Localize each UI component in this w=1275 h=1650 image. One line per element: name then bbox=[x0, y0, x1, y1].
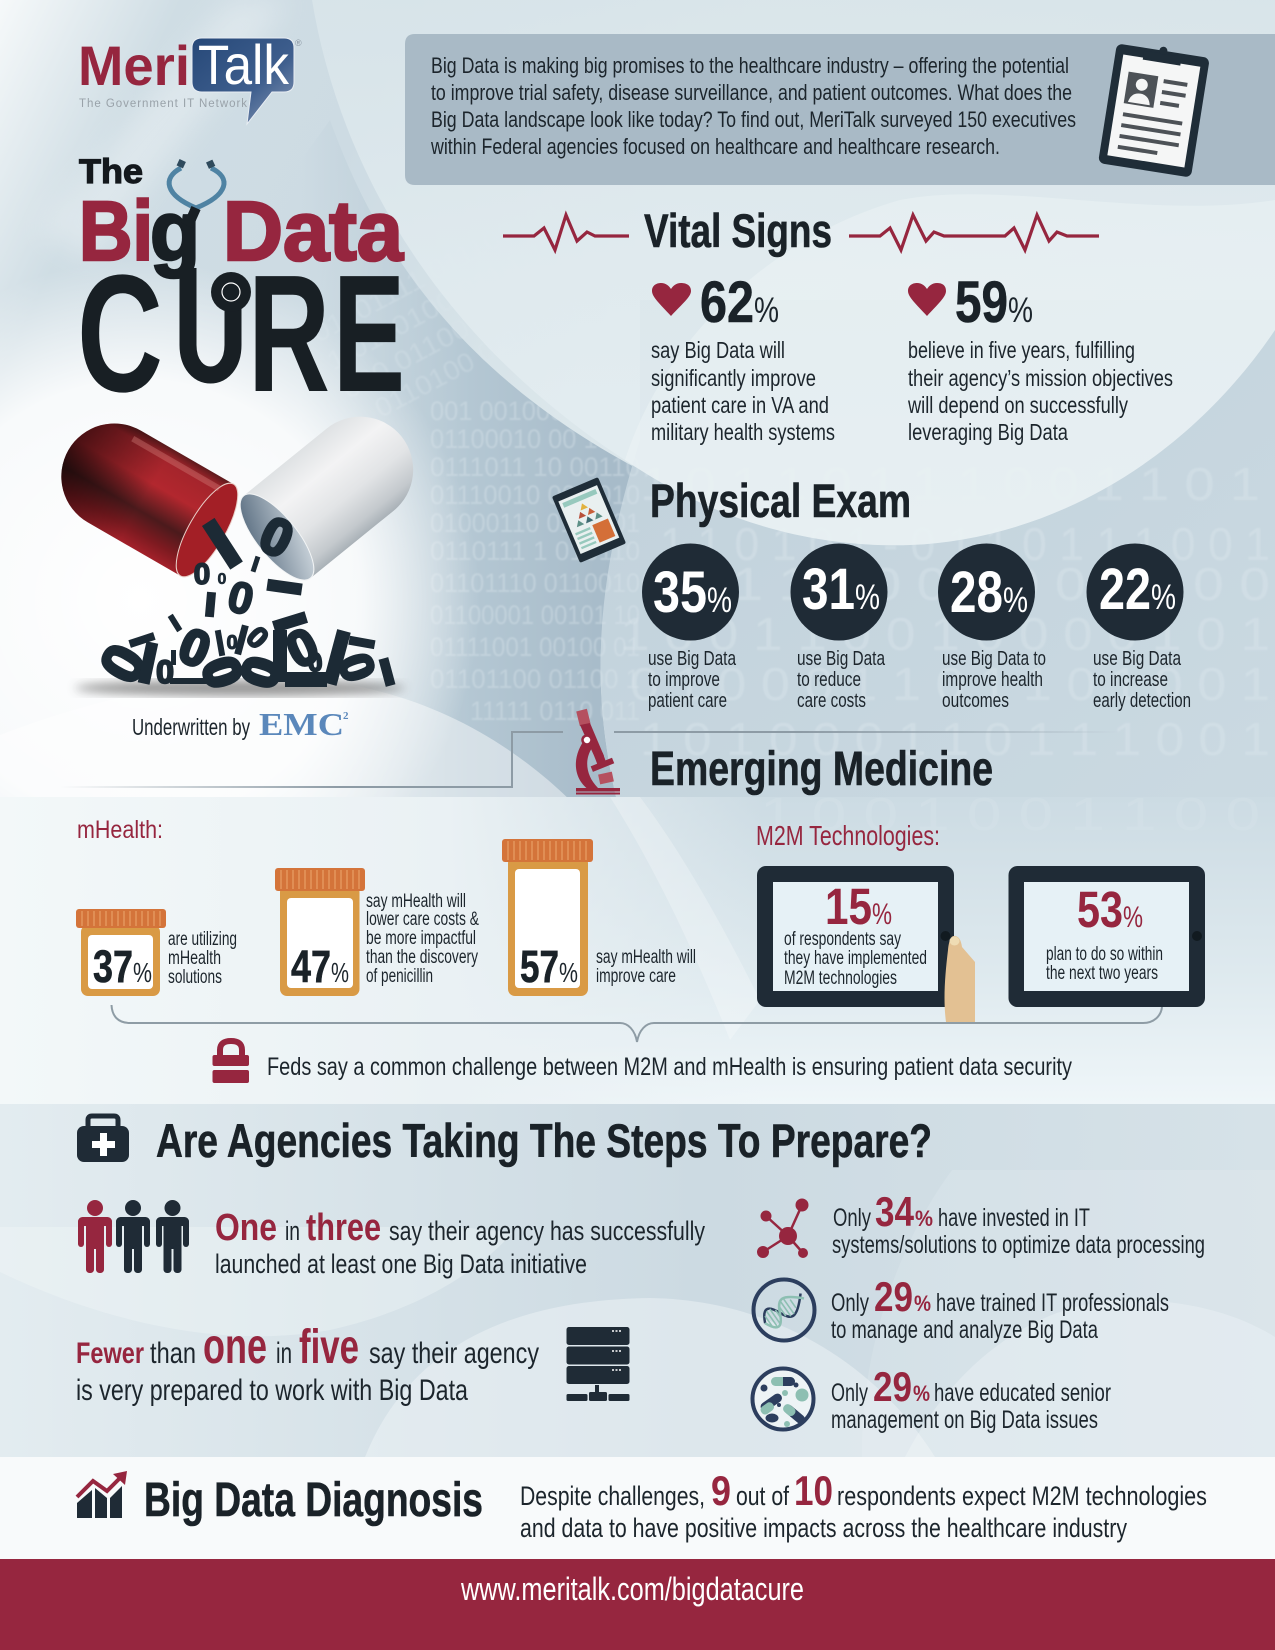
bottle 47%: of penicillin bbox=[366, 966, 433, 987]
background: upper collage: 0110100 01100100 00 bbox=[370, 266, 631, 423]
tablet 53%: % bbox=[1123, 901, 1143, 934]
stat: 59%: 59 bbox=[955, 270, 1008, 335]
background: upper collage: 01100010 00 1000 bbox=[430, 424, 640, 454]
section: Big Data Diagnosis: 10 bbox=[794, 1467, 833, 1514]
stat: 62%: patient care in VA and bbox=[651, 392, 829, 418]
icon: lock bbox=[212, 1041, 249, 1083]
footer band bbox=[0, 1559, 1275, 1650]
background: emerging medicine band: 1 0 0 1 0 0 1 1 0 0 bbox=[760, 788, 1260, 840]
heartbeat line left bbox=[503, 215, 629, 250]
bottle 57%: improve care bbox=[596, 966, 676, 987]
stat: one in three: three bbox=[306, 1207, 381, 1249]
background: agencies band bbox=[0, 1104, 1275, 1457]
icon: tablet chart bbox=[552, 477, 626, 563]
logo: MeriTalk: Meri bbox=[78, 34, 190, 97]
stat: 22%: early detection bbox=[1093, 690, 1191, 712]
sponsor: Underwritten by EMC bbox=[132, 706, 349, 742]
title: The Big Data Cure: Data bbox=[223, 184, 404, 278]
background: upper collage: 0110111 1 010110 bbox=[430, 536, 640, 566]
stat: 34% IT systems bbox=[758, 1188, 1205, 1259]
stat: 62%: say Big Data will bbox=[651, 337, 785, 363]
title: The Big Data Cure: The bbox=[79, 153, 143, 191]
bottle 37% bbox=[76, 909, 237, 996]
stat: 59%: believe in five years, fulfilling bbox=[908, 337, 1135, 363]
background: upper collage: 1 0110100 01101110 0 bbox=[322, 209, 601, 376]
stat: 62%: % bbox=[754, 291, 779, 330]
background: upper collage: 1 0 0 1 1 0 0 1 0 0 0 0 1 0 1 bbox=[620, 608, 1270, 660]
bottle 47% bbox=[275, 868, 479, 996]
bottle 57% bbox=[502, 839, 696, 996]
background: upper collage: 0 1 0 0 0 1 1 0 1 1 0 1 0 0 1 bbox=[630, 658, 1270, 710]
falling digits: 0 bbox=[194, 558, 210, 591]
background: upper collage: 01101111 01110010 01 bbox=[307, 181, 586, 348]
pile of digits: 0 bbox=[171, 617, 218, 679]
tablet 53%: the next two years bbox=[1046, 963, 1158, 984]
tablet 15% bbox=[757, 866, 954, 1007]
stat: 59%: will depend on successfully bbox=[907, 392, 1128, 418]
background: upper collage: 1 1 0 1 0 1 - 0 1 1 0 1 1 1 0 0 1 bbox=[660, 518, 1270, 570]
icon: DNA bbox=[754, 1280, 814, 1340]
stat: 34% IT systems: have invested in IT bbox=[938, 1204, 1090, 1232]
icon: rising chart bbox=[77, 1471, 127, 1518]
bottle 47%: lower care costs & bbox=[366, 909, 479, 930]
callout: patient data security: Feds say a common challenge between M2M and mHealth is ensuring patient data security bbox=[267, 1053, 1072, 1081]
stat: 31%: % bbox=[855, 578, 880, 617]
logo: MeriTalk: ® bbox=[295, 38, 302, 48]
logo: MeriTalk: The Government IT Network bbox=[79, 98, 247, 110]
stat: 29% trained IT professionals: to manage and analyze Big Data bbox=[831, 1316, 1098, 1344]
stat: 29% trained IT professionals: % bbox=[914, 1291, 931, 1316]
red capsule half bbox=[42, 404, 249, 585]
stat: 62%: military health systems bbox=[651, 419, 835, 445]
icon: network nodes bbox=[758, 1199, 808, 1258]
background: upper collage: 01101110 0110010 bbox=[430, 568, 640, 598]
title: The Big Data Cure: C bbox=[77, 241, 163, 427]
stat: 59%: % bbox=[1008, 291, 1033, 330]
stat: 22%: to increase bbox=[1093, 669, 1168, 691]
bottle 37%: solutions bbox=[168, 967, 222, 988]
background: upper collage: 01101100 01100 1 bbox=[430, 664, 640, 694]
stat: 28%: outcomes bbox=[942, 690, 1009, 712]
stat: fewer than one in five: in bbox=[276, 1337, 292, 1370]
icon: microscope bbox=[576, 709, 620, 794]
falling digits: 0 bbox=[218, 571, 227, 588]
pile of digits: 0 bbox=[306, 646, 324, 678]
title: The Big Data Cure: E bbox=[333, 241, 405, 427]
tablet 15%: 15 bbox=[825, 878, 872, 935]
title: The Big Data Cure bbox=[77, 153, 405, 427]
logo: MeriTalk: Talk bbox=[198, 33, 290, 96]
falling digits: 0 bbox=[251, 505, 302, 570]
tablet 53%: 53 bbox=[1077, 881, 1123, 938]
stat: 34% IT systems: Only bbox=[833, 1204, 871, 1232]
stat: 35%: to improve bbox=[648, 669, 720, 691]
panel: mHealth: mHealth: bbox=[77, 816, 163, 844]
background: upper collage: 000 01100100 01111 1 bbox=[337, 237, 616, 405]
sponsor: Underwritten by EMC: EMC bbox=[259, 706, 344, 742]
stat: one in three: One bbox=[215, 1207, 277, 1249]
bottle 47%: than the discovery bbox=[366, 947, 478, 968]
stat: 35%: 35 bbox=[653, 560, 707, 625]
bottle 57%: 57 bbox=[520, 941, 559, 992]
brace joining mHealth and M2M bbox=[112, 1005, 1162, 1042]
stat: 62%: significantly improve bbox=[651, 365, 816, 391]
pile of digits: 0 bbox=[191, 650, 253, 694]
sponsor: Underwritten by EMC: 2 bbox=[343, 710, 349, 722]
icon: first aid kit bbox=[77, 1116, 129, 1162]
stat: fewer than one in five: is very prepared to work with Big Data bbox=[76, 1374, 468, 1407]
stat: 28%: % bbox=[1003, 581, 1028, 620]
stat: 35%: use Big Data bbox=[648, 648, 737, 670]
stat: one in three bbox=[78, 1200, 705, 1279]
bottle 37%: mHealth bbox=[168, 948, 221, 969]
background: upper collage: 1 0 1 0 0 0 1 1 0 1 1 1 0 0 1 bbox=[640, 713, 1270, 765]
stat: 28%: use Big Data to bbox=[942, 648, 1046, 670]
section: Big Data Diagnosis: out of bbox=[736, 1481, 789, 1511]
panel: M2M Technologies: M2M Technologies: bbox=[756, 820, 940, 851]
bottle 57%: % bbox=[559, 957, 578, 988]
stat: 22% bbox=[1086, 544, 1191, 712]
stat: 29% educated management: Only bbox=[831, 1379, 868, 1407]
background: upper collage: 01111001 00100 01 bbox=[430, 632, 640, 662]
pile of digits: 0 bbox=[87, 634, 160, 694]
pile of digits bbox=[87, 611, 395, 694]
background: upper collage bbox=[0, 0, 1275, 880]
stat: 59%: their agency’s mission objectives bbox=[908, 365, 1173, 391]
panel: mHealth bbox=[76, 816, 696, 996]
icon: hand holding tablet bbox=[945, 936, 975, 1022]
background: upper collage: 001 00100000 011 bbox=[430, 396, 640, 426]
pile of digits: 0 bbox=[230, 650, 292, 694]
stat: fewer than one in five: say their agency bbox=[369, 1337, 539, 1370]
stat: 35%: patient care bbox=[648, 690, 727, 712]
bottle 37%: % bbox=[133, 957, 152, 988]
bottle 57%: say mHealth will bbox=[596, 947, 696, 968]
icon: three people bbox=[78, 1200, 189, 1273]
tablet 15%: % bbox=[872, 898, 892, 931]
bottle 37%: are utilizing bbox=[168, 929, 237, 950]
background: upper collage: 0111011 10 00110 bbox=[430, 452, 640, 482]
stat: fewer than one in five: five bbox=[299, 1321, 359, 1374]
stat: 31%: 31 bbox=[802, 557, 855, 622]
stat: 34% IT systems: 34 bbox=[875, 1188, 915, 1235]
stat: fewer than one in five: Fewer bbox=[76, 1337, 144, 1370]
icon: server bbox=[566, 1327, 630, 1401]
tablet 15%: M2M technologies bbox=[784, 968, 897, 989]
section: Big Data Diagnosis: Big Data Diagnosis bbox=[144, 1474, 483, 1527]
bottle 47%: % bbox=[331, 957, 349, 988]
title: The Big Data Cure: R bbox=[248, 241, 330, 427]
stat: 29% trained IT professionals: 29 bbox=[874, 1273, 913, 1320]
tablet 15%: of respondents say bbox=[784, 929, 901, 950]
footer url: www.meritalk.com/bigdatacure bbox=[460, 1571, 804, 1607]
background: upper collage: 01100001 00101 10 bbox=[430, 600, 640, 630]
white capsule half bbox=[228, 395, 435, 591]
background: diagnosis band bbox=[0, 1457, 1275, 1559]
section: Big Data Diagnosis: Despite challenges, bbox=[520, 1481, 705, 1511]
stat: 62%: 62 bbox=[700, 270, 754, 335]
stat: 62% bbox=[651, 270, 835, 445]
title: The Big Data Cure: g bbox=[150, 184, 200, 278]
section: Physical Exam bbox=[642, 474, 1191, 712]
stat: 29% trained IT professionals: have trained IT professionals bbox=[936, 1289, 1169, 1317]
icon: pills and bandages bbox=[752, 1368, 814, 1430]
stat: fewer than one in five: one bbox=[203, 1318, 267, 1374]
stat: 29% educated management: 29 bbox=[873, 1363, 912, 1410]
stat: 34% IT systems: % bbox=[915, 1206, 933, 1231]
title: The Big Data Cure: Bi bbox=[79, 184, 153, 278]
stat: 22%: % bbox=[1151, 578, 1176, 617]
callout: patient data security bbox=[212, 1041, 1072, 1083]
falling digits: 0 bbox=[223, 572, 258, 625]
stat: 59% bbox=[907, 270, 1173, 445]
section heading: Are Agencies Taking The Steps To Prepare?: Are Agencies Taking The Steps To Prepare? bbox=[156, 1114, 932, 1167]
stat: 28%: improve health bbox=[942, 669, 1043, 691]
illustration: capsule spilling binary digits bbox=[42, 395, 435, 696]
section: Physical Exam: Physical Exam bbox=[650, 474, 911, 527]
stat: 28%: 28 bbox=[950, 560, 1003, 625]
stat: 59%: leveraging Big Data bbox=[908, 419, 1068, 445]
connector lines bbox=[60, 731, 1120, 787]
background: upper collage: 01000110 0111001 bbox=[430, 508, 640, 538]
stat: 31%: care costs bbox=[797, 690, 866, 712]
bottle 47%: say mHealth will bbox=[366, 891, 466, 912]
stat: 35%: % bbox=[707, 581, 732, 620]
intro panel: Big Data landscape look like today? To find out, MeriTalk surveyed 150 executives bbox=[431, 107, 1076, 132]
section: Big Data Diagnosis bbox=[77, 1467, 1207, 1543]
bottle 47%: 47 bbox=[291, 941, 331, 992]
stat: 22%: 22 bbox=[1099, 557, 1151, 622]
icon: clipboard bbox=[1098, 39, 1210, 178]
intro panel: within Federal agencies focused on healthcare and healthcare research. bbox=[430, 134, 1000, 159]
stat: 31%: to reduce bbox=[797, 669, 861, 691]
background: upper collage: 11111 0110 011 bbox=[470, 696, 640, 726]
falling digits bbox=[168, 505, 303, 632]
bottle 47%: be more impactful bbox=[366, 928, 476, 949]
background: emerging medicine band bbox=[0, 788, 1275, 1104]
sponsor: Underwritten by EMC: Underwritten by bbox=[132, 714, 250, 740]
stat: 28% bbox=[938, 544, 1046, 712]
pile of digits: 0 bbox=[239, 620, 275, 656]
stat: 22%: use Big Data bbox=[1093, 648, 1182, 670]
stat: fewer than one in five bbox=[76, 1318, 630, 1407]
stat: 31% bbox=[790, 544, 888, 712]
pile of digits: 0 bbox=[278, 617, 327, 679]
tablet 15%: they have implemented bbox=[784, 948, 927, 969]
intro panel bbox=[405, 34, 1275, 185]
section: Vital Signs bbox=[503, 204, 1173, 445]
section: Vital Signs: Vital Signs bbox=[644, 204, 832, 257]
stat: one in three: say their agency has successfully bbox=[389, 1216, 705, 1246]
bottle 37%: 37 bbox=[93, 941, 133, 992]
stat: one in three: launched at least one Big Data initiative bbox=[215, 1249, 587, 1279]
background: upper collage: 01110010 00 1010 bbox=[430, 480, 640, 510]
stat: 29% trained IT professionals bbox=[754, 1273, 1169, 1344]
stat: 35% bbox=[642, 544, 739, 712]
pile of digits: 0 bbox=[156, 654, 174, 690]
stat: fewer than one in five: than bbox=[150, 1337, 196, 1370]
section: Big Data Diagnosis: 9 bbox=[711, 1467, 731, 1514]
stat: 29% educated management: have educated senior bbox=[934, 1379, 1111, 1407]
stat: 29% educated management: % bbox=[913, 1381, 930, 1406]
stat: 29% educated management: management on Big Data issues bbox=[831, 1406, 1098, 1434]
heading: Emerging Medicine: Emerging Medicine bbox=[650, 743, 993, 796]
stat: one in three: in bbox=[285, 1216, 300, 1246]
background: upper collage: 1 0 1 1 0 1 1 1 0 0 1 1 0 1 bbox=[640, 458, 1260, 510]
section: Big Data Diagnosis: and data to have positive impacts across the healthcare industry bbox=[520, 1513, 1127, 1543]
pile of digits: 0 bbox=[226, 632, 238, 654]
stat: 29% educated management bbox=[752, 1363, 1111, 1434]
intro panel: to improve trial safety, disease surveillance, and patient outcomes. What does the bbox=[431, 80, 1072, 105]
intro panel: Big Data is making big promises to the healthcare industry – offering the potential bbox=[431, 53, 1069, 78]
tablet 53%: plan to do so within bbox=[1046, 944, 1163, 965]
stat: 29% trained IT professionals: Only bbox=[831, 1289, 869, 1317]
logo: MeriTalk bbox=[78, 33, 302, 124]
stat: 31%: use Big Data bbox=[797, 648, 886, 670]
heartbeat line right bbox=[849, 215, 1099, 250]
pile of digits: 0 bbox=[328, 647, 386, 688]
background: upper collage: 0 1 1 1 0 0 0 1 0 0 1 1 0 0 bbox=[640, 558, 1270, 610]
tablet 53% bbox=[1008, 866, 1205, 1007]
panel: M2M Technologies bbox=[756, 820, 1205, 1022]
